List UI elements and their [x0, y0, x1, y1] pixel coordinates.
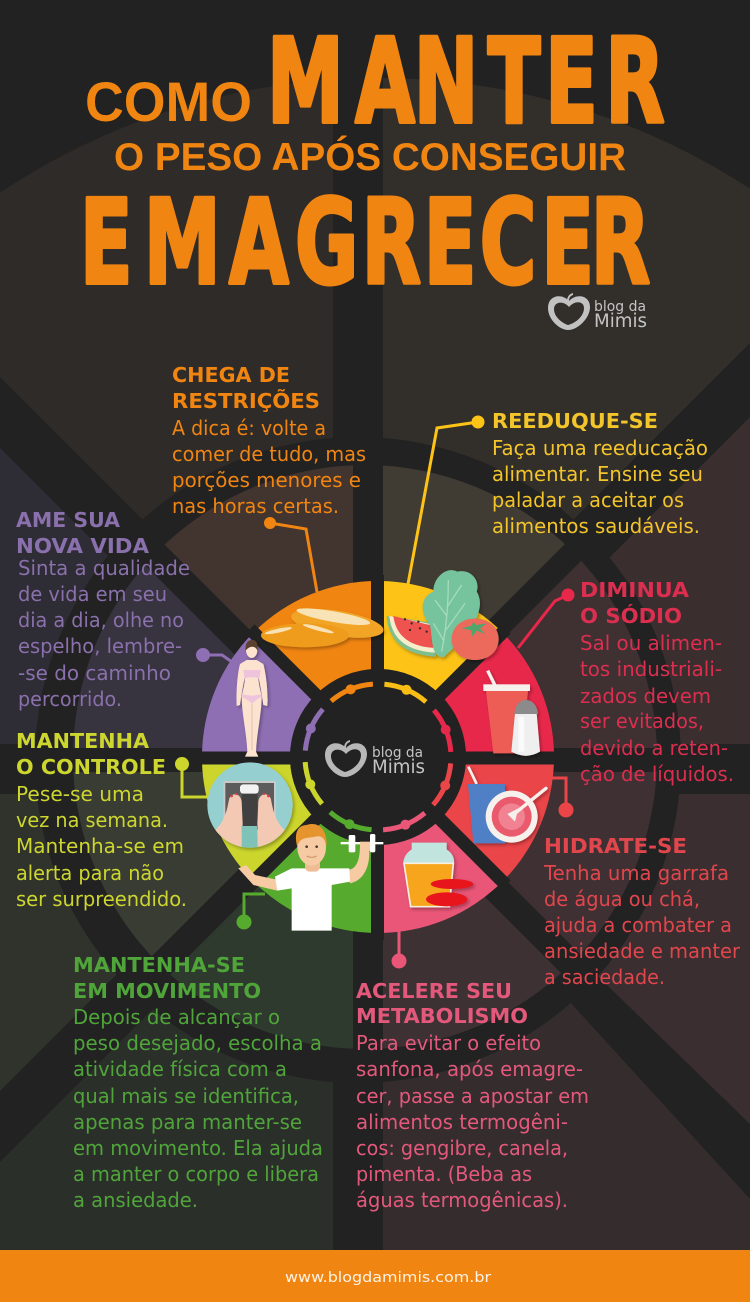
text block: águas termogênicas).: [356, 1188, 568, 1212]
title: EMAGRECER: [80, 176, 650, 311]
text block: de vida em seu: [18, 582, 167, 606]
connector: orange: [266, 518, 317, 592]
panel: diminua o sódio: [580, 578, 734, 786]
text block: cos: gengibre, canela,: [356, 1136, 568, 1160]
panel: hidrate-se: [543, 834, 741, 989]
text block: Pese-se uma: [16, 782, 144, 806]
text block: [18, 556, 190, 711]
connector: olive: [176, 758, 210, 797]
text block: ajuda a combater a: [544, 913, 732, 937]
text block: vez na semana.: [16, 808, 168, 832]
panel: chega de restrições: [172, 363, 366, 518]
heading: [73, 953, 261, 1003]
text block: percorrido.: [18, 687, 122, 711]
heading: O SÓDIO: [580, 604, 682, 628]
heading: MANTENHA: [16, 729, 150, 753]
icon: soda cup: [483, 671, 530, 753]
title: O PESO APÓS CONSEGUIR: [114, 135, 626, 179]
heading: [172, 363, 320, 413]
heading: METABOLISMO: [356, 1004, 528, 1028]
text block: a saciedade.: [544, 965, 665, 989]
heading: CHEGA DE: [172, 363, 290, 387]
footer bar: [0, 1250, 750, 1302]
text block: Depois de alcançar o: [73, 1005, 280, 1029]
logo: blog da Mimis top: [548, 293, 647, 332]
text block: [73, 1005, 323, 1212]
wheel: [166, 545, 590, 969]
panel: mantenha-se em movimento: [73, 953, 323, 1212]
text block: tos industriali-: [580, 657, 722, 681]
heading: [16, 729, 166, 779]
text block: [492, 436, 708, 538]
icon: bread: [261, 604, 385, 647]
text block: [543, 861, 741, 989]
connector: pink: [393, 930, 405, 967]
text block: ser evitados,: [580, 709, 704, 733]
icon: jar with pepper slices: [403, 843, 473, 907]
logo: blog da Mimis top: Mimis: [594, 311, 647, 332]
text block: pimenta. (Beba as: [356, 1162, 532, 1186]
icon: tomato: [452, 619, 499, 660]
logo: blog da Mimis top: blog da: [594, 299, 646, 315]
text block: [16, 782, 187, 911]
text block: [580, 631, 734, 786]
heading: [356, 979, 528, 1028]
connector: coral: [550, 778, 572, 816]
heading: DIMINUA: [580, 578, 690, 602]
text block: alimentos termogêni-: [356, 1110, 568, 1134]
text block: a manter o corpo e libera: [73, 1162, 319, 1186]
text block: ansiedade e manter: [544, 939, 741, 963]
text block: devido a reten-: [580, 736, 728, 760]
icon: salt shaker: [511, 700, 540, 756]
icon: man with dumbbell: [238, 824, 383, 931]
text block: paladar a aceitar os: [492, 488, 684, 512]
text block: [356, 1031, 589, 1212]
website url: www.blogdamimis.com.br: [285, 1270, 491, 1286]
title: [80, 15, 665, 311]
text block: zados devem: [580, 684, 711, 708]
heading: ACELERE SEU: [356, 979, 512, 1003]
logo: blog da Mimis center: [325, 740, 425, 778]
text block: alimentar. Ensine seu: [492, 462, 703, 486]
logo: blog da Mimis center: Mimis: [372, 757, 425, 778]
text block: em movimento. Ela ajuda: [73, 1136, 323, 1160]
text block: Mantenha-se em: [16, 834, 184, 858]
heading: HIDRATE-SE: [544, 834, 687, 858]
icon: lettuce: [423, 570, 480, 657]
text block: Para evitar o efeito: [356, 1031, 541, 1055]
text block: alimentos saudáveis.: [492, 514, 700, 538]
panel: reeduque-se: [492, 409, 708, 538]
connector: red: [518, 590, 573, 648]
heading: MANTENHA-SE: [73, 953, 245, 977]
text block: Sal ou alimen-: [580, 631, 722, 655]
text block: [172, 416, 366, 518]
text block: sanfona, após emagre-: [356, 1057, 583, 1081]
title: MANTER: [267, 15, 665, 150]
heading: [580, 578, 690, 628]
heading: O CONTROLE: [16, 755, 166, 779]
icon: watermelon: [387, 616, 436, 657]
heading: REEDUQUE-SE: [492, 409, 658, 433]
text block: espelho, lembre-: [18, 634, 182, 658]
connector: purple: [198, 650, 232, 662]
heading: EM MOVIMENTO: [73, 979, 261, 1003]
text block: porções menores e: [172, 468, 361, 492]
text block: ser surpreendido.: [16, 887, 187, 911]
icon: water glass and plate: [468, 767, 546, 843]
text block: a ansiedade.: [73, 1188, 198, 1212]
panel: ame sua nova vida: [16, 508, 190, 711]
title: COMO: [85, 70, 252, 133]
connector: yellow: [408, 417, 483, 584]
text block: cer, passe a apostar em: [356, 1084, 589, 1108]
text block: Faça uma reeducação: [492, 436, 708, 460]
text block: peso desejado, escolha a: [73, 1031, 322, 1055]
text block: comer de tudo, mas: [172, 442, 366, 466]
text block: ção de líquidos.: [580, 762, 734, 786]
text block: A dica é: volte a: [172, 416, 326, 440]
icon: scale on teal circle: [207, 762, 293, 850]
text block: dia a dia, olhe no: [18, 608, 184, 632]
text block: Sinta a qualidade: [18, 556, 190, 580]
text block: apenas para manter-se: [73, 1110, 302, 1134]
text block: qual mais se identifica,: [73, 1084, 299, 1108]
icon layer in wheel: [207, 570, 546, 931]
heading: AME SUA: [16, 508, 121, 532]
heading: [16, 508, 150, 558]
logo: blog da Mimis center: blog da: [372, 745, 423, 761]
panel: acelere seu metabolismo: [356, 979, 589, 1212]
text block: atividade física com a: [73, 1057, 287, 1081]
text block: alerta para não: [16, 861, 164, 885]
connector: green: [238, 894, 265, 928]
icon: woman: [236, 640, 268, 757]
text block: nas horas certas.: [172, 494, 339, 518]
heading: NOVA VIDA: [16, 534, 150, 558]
text block: -se do caminho: [18, 661, 171, 685]
panel: mantenha o controle: [16, 729, 187, 911]
heading: RESTRIÇÕES: [172, 389, 320, 413]
text block: de água ou chá,: [544, 887, 700, 911]
text block: Tenha uma garrafa: [543, 861, 729, 885]
